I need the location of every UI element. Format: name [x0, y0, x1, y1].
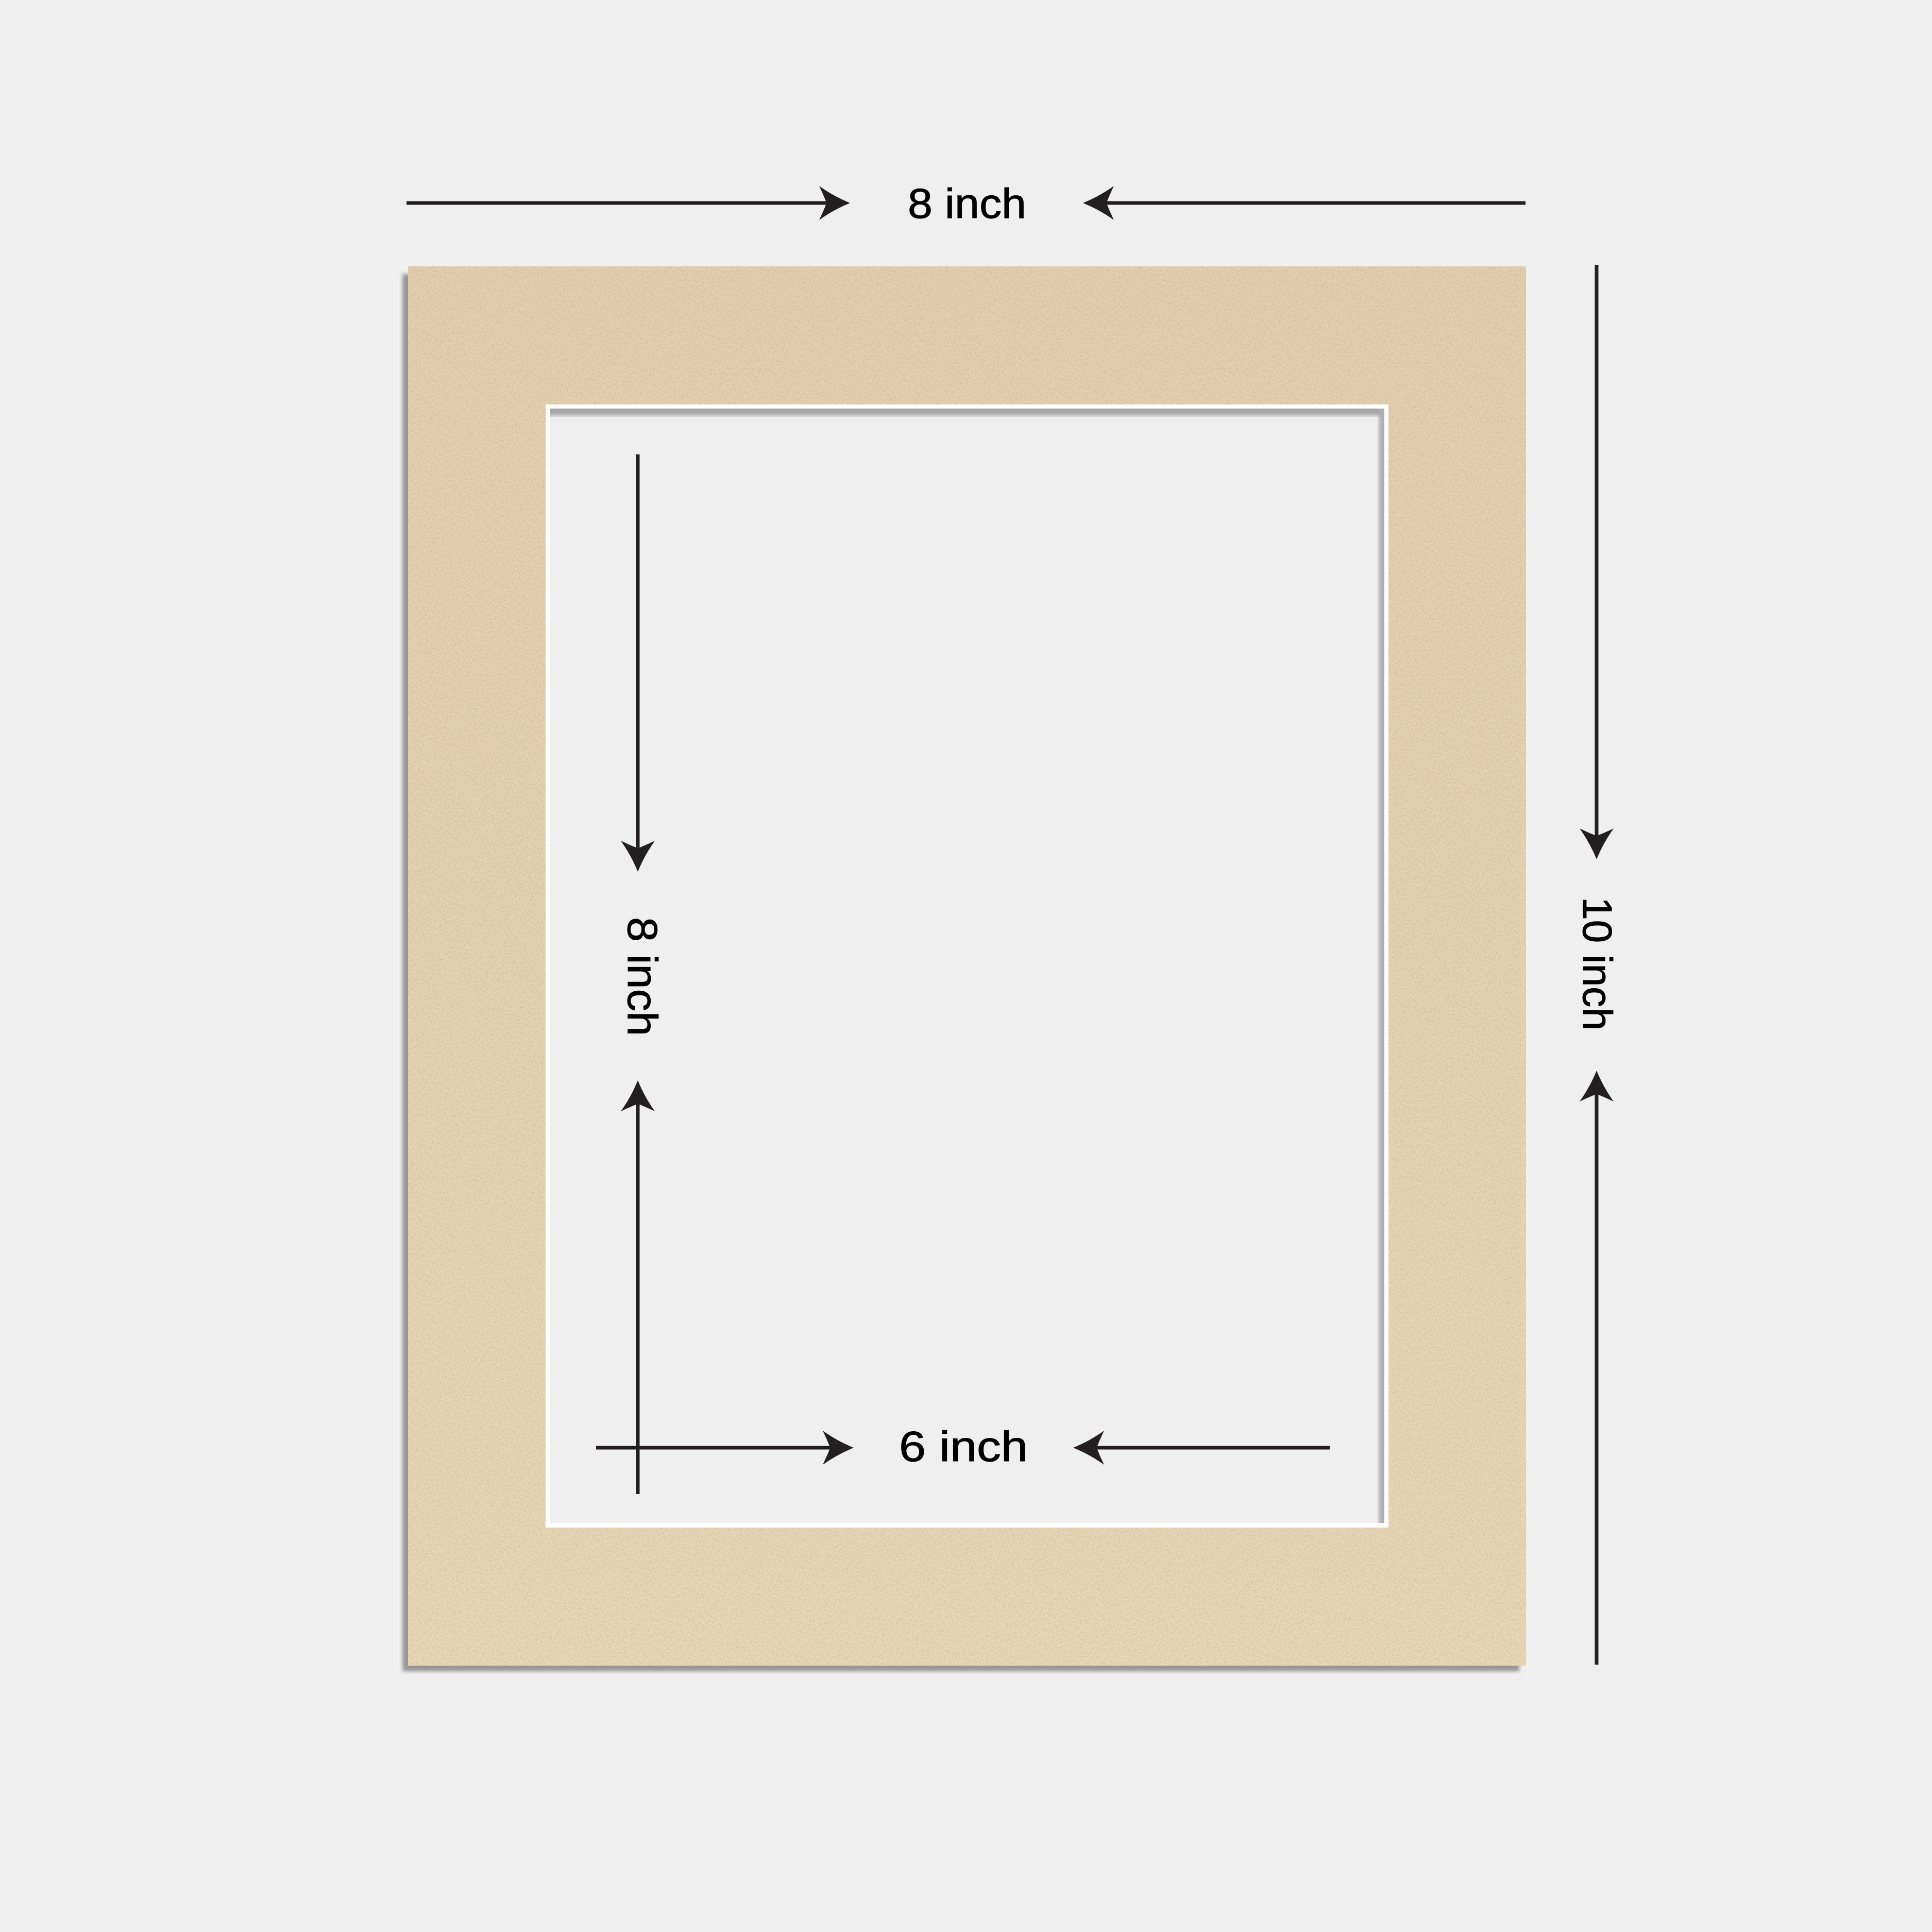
dimension: window height 8 inch — [619, 454, 666, 1494]
label: 8 inch: 8 inch — [908, 180, 1026, 227]
label: 8 inch: 8 inch — [619, 917, 666, 1036]
label: 10 inch: 10 inch — [1574, 897, 1620, 1030]
mat drop shadow — [402, 263, 1530, 1671]
arrow: top pointing down — [1580, 265, 1614, 859]
dimension: outer height 10 inch — [1574, 265, 1620, 1665]
arrow: top pointing down — [621, 454, 655, 872]
label: 6 inch: 6 inch — [899, 1422, 1028, 1470]
mat surface — [408, 266, 1526, 1666]
arrow: bottom pointing up — [1580, 1071, 1614, 1665]
arrow: left pointing right — [596, 1431, 854, 1465]
window inner shadow — [550, 187, 1384, 1523]
arrow: left pointing right — [406, 186, 850, 220]
dimension: outer width 8 inch — [406, 180, 1526, 227]
white bevel — [546, 404, 1388, 1528]
arrow: right pointing left — [1083, 186, 1526, 220]
dimension: window width 6 inch — [596, 1422, 1330, 1470]
arrow: right pointing left — [1073, 1431, 1330, 1465]
mat board with window opening — [402, 263, 1530, 1671]
window opening — [546, 404, 1388, 1528]
arrow: bottom pointing up — [621, 1080, 655, 1494]
